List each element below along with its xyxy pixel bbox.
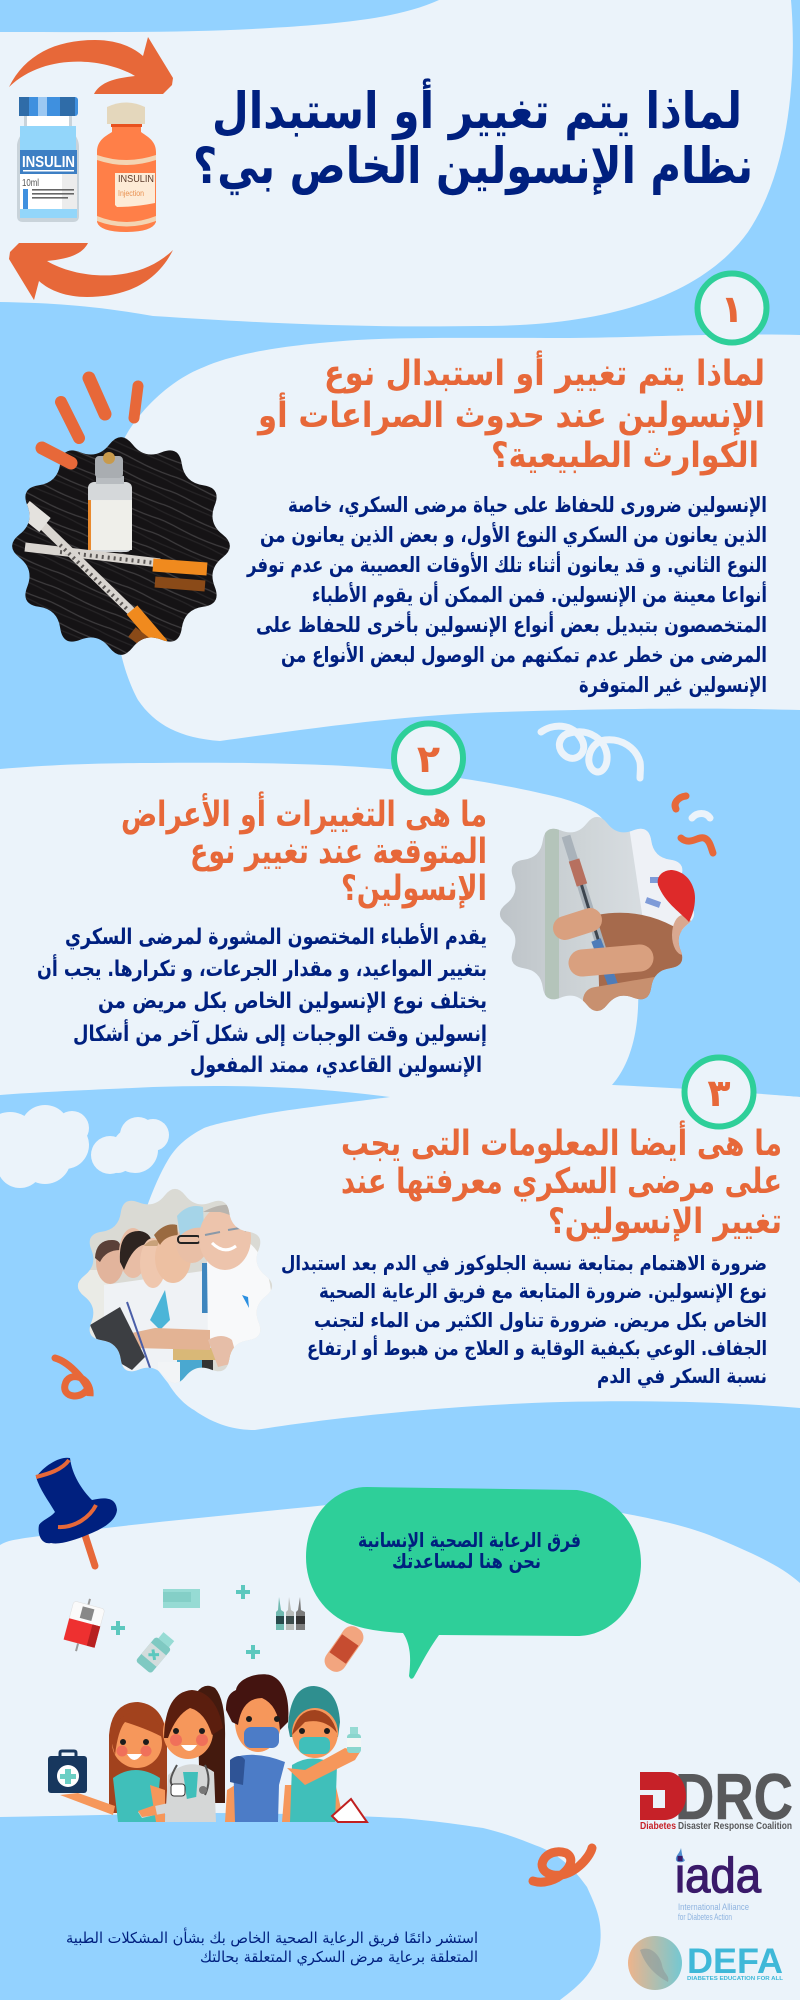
text block: footer note: المتعلقة برعاية مرض السكري المتعلقة بحالتك	[200, 1948, 478, 1967]
icon: orange insulin vial: Injection	[118, 189, 144, 198]
callout: speech bubble: نحن هنا لمساعدتك	[392, 1549, 541, 1573]
logo: IADA: International Alliance	[678, 1902, 749, 1913]
heading: section 2: المتوقعة عند تغيير نوع	[190, 832, 487, 872]
panel: section 1 background	[113, 335, 800, 741]
text block: section 2 body: الإنسولين القاعدي، ممتد المفعول	[190, 1053, 482, 1078]
icon: blood bag	[62, 1595, 106, 1655]
heading: section 3	[341, 1120, 782, 1242]
text block: section 3 body	[281, 1251, 767, 1389]
icon: blue insulin vial: INSULIN	[22, 154, 75, 171]
icon: orange curl near photo	[55, 1358, 90, 1396]
icon: clouds	[0, 1105, 169, 1188]
number badge 3	[684, 1058, 754, 1126]
text block: section 2 body: إنسولين وقت الوجبات إلى شكل آخر من أشكال	[73, 1018, 487, 1047]
first aid kit	[48, 1751, 87, 1793]
logo: DDRC: Diabetes	[640, 1821, 676, 1832]
panel: header	[0, 0, 793, 326]
number badge 1: ١	[720, 287, 744, 331]
text block: footer note: استشر دائمًا فريق الرعاية الصحية الخاص بك بشأن المشكلات الطبية	[66, 1927, 478, 1947]
panel: section 3 background	[125, 1085, 800, 1430]
icon: orange insulin vial	[97, 102, 156, 232]
number badge 3: ٣	[707, 1071, 731, 1115]
icon: orange squiggles	[675, 796, 713, 853]
text block: footer note	[66, 1927, 478, 1967]
text block: section 3 body: نسبة السكر في الدم	[597, 1364, 767, 1389]
text block: section 2 body: يختلف نوع الإنسولين الخاص بكل مريض من	[98, 989, 487, 1014]
icon: plus signs	[111, 1585, 260, 1659]
title	[193, 78, 753, 196]
panel: section 2 background	[0, 763, 800, 1110]
icon: orange loop	[533, 1848, 592, 1882]
icon: top cycle arrow	[9, 37, 173, 94]
icon: medicine bottle	[135, 1630, 177, 1674]
illustration: healthcare team	[48, 1674, 367, 1822]
number badge 1	[698, 274, 766, 342]
callout: speech bubble: فرق الرعاية الصحية الإنسانية	[358, 1528, 581, 1552]
text block: section 2 body: بتغيير المواعيد، و مقدار الجرعات، و تكرارها. يجب أن	[37, 953, 487, 982]
heading: section 1	[256, 350, 765, 476]
logo: DEFA: DEFA	[687, 1942, 783, 1981]
logo: DEFA: DIABETES EDUCATION FOR ALL	[687, 1976, 784, 1982]
icon: orange insulin vial: INSULIN	[118, 174, 154, 185]
logo: IADA: for Diabetes Action	[678, 1912, 732, 1923]
heading: section 1: الكوارث الطبيعية؟	[491, 436, 759, 476]
nurse with mask	[282, 1686, 367, 1822]
logo: IADA: iada	[675, 1849, 762, 1903]
icon: blue insulin vial	[17, 97, 79, 222]
icon: red drop patch	[658, 870, 695, 922]
logo: DEFA	[628, 1936, 784, 1990]
panel: footer background	[0, 1498, 800, 2000]
heading: section 2	[121, 791, 487, 909]
text block: section 2 body: يقدم الأطباء المختصون المشورة لمرضى السكري	[65, 922, 487, 950]
callout: speech bubble	[306, 1487, 641, 1679]
photo: medical team	[78, 1189, 272, 1383]
logo: IADA	[675, 1848, 762, 1923]
icon: bandage	[321, 1622, 367, 1676]
text block: section 2 body	[37, 922, 487, 1078]
icon: white scribble	[541, 726, 640, 778]
icon: bottom cycle arrow	[9, 243, 173, 300]
photo: insulin vial and syringes	[12, 437, 230, 655]
heading: section 2: الإنسولين؟	[341, 869, 487, 909]
woman doctor	[138, 1686, 225, 1822]
woman with kit	[60, 1702, 167, 1822]
icon: orange burst lines	[42, 378, 138, 463]
text block: section 1 body	[246, 493, 767, 697]
photo: insulin pen in hand	[500, 817, 694, 1012]
number badge 2	[394, 724, 463, 792]
heading: section 2: ما هى التغييرات أو الأعراض	[121, 791, 487, 835]
icon: ampoules	[276, 1597, 305, 1630]
man with mask	[225, 1674, 288, 1822]
number badge 2: ٢	[417, 737, 440, 781]
icon: push pin	[36, 1458, 117, 1566]
icon: blue insulin vial: 10ml	[22, 178, 39, 189]
icon: medicine box	[163, 1589, 200, 1608]
